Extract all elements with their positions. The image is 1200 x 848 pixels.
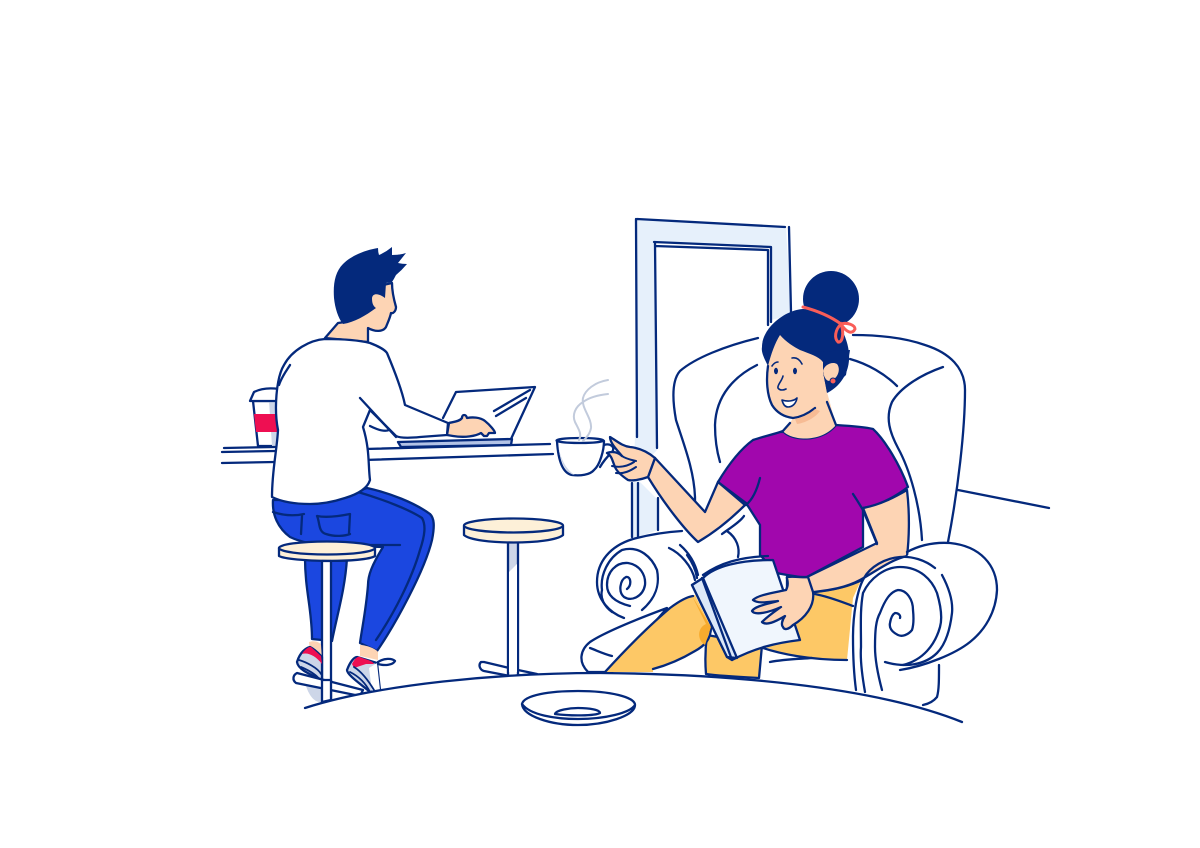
shadow under chin bbox=[795, 409, 820, 424]
stool under man bbox=[279, 542, 375, 702]
trousers: thigh right bbox=[760, 578, 862, 660]
chair back bbox=[673, 335, 964, 545]
neck and head skin bbox=[325, 283, 396, 342]
steam bbox=[574, 380, 608, 441]
table bbox=[305, 673, 962, 848]
arm holding cup bbox=[648, 458, 745, 542]
seat cushion left bbox=[581, 608, 667, 672]
coffee cup bbox=[556, 380, 613, 475]
laptop bbox=[398, 387, 535, 447]
hand typing bbox=[447, 415, 495, 437]
coffee cup to go bbox=[250, 388, 280, 446]
arm holding book bbox=[787, 490, 909, 592]
sneakers bbox=[297, 641, 395, 702]
door frame bbox=[632, 218, 791, 537]
armchair bbox=[581, 335, 965, 672]
wall line bbox=[958, 490, 1049, 508]
face and neck skin bbox=[767, 335, 836, 439]
ear bbox=[823, 363, 839, 381]
earring bbox=[830, 378, 836, 384]
hand over book bbox=[752, 577, 813, 629]
face outline bbox=[767, 366, 836, 432]
stool footrest bbox=[293, 673, 363, 696]
hair bbox=[334, 247, 407, 324]
ribbon bbox=[803, 307, 855, 342]
man bbox=[222, 247, 553, 702]
jeans back leg bbox=[305, 558, 347, 641]
hair bbox=[762, 309, 849, 393]
open book bbox=[692, 556, 800, 660]
left armrest bbox=[597, 516, 744, 618]
jeans bbox=[273, 488, 434, 651]
woman bbox=[605, 271, 909, 678]
bar counter bbox=[222, 444, 553, 464]
trousers: far leg bbox=[705, 635, 762, 678]
eyes bbox=[774, 368, 797, 374]
trousers: near leg bbox=[605, 595, 711, 672]
right armrest bbox=[850, 543, 997, 705]
brows, nose and mouth bbox=[772, 358, 802, 407]
hair side bbox=[815, 350, 850, 393]
torso shirt bbox=[718, 425, 908, 578]
stool front bbox=[464, 518, 563, 676]
hand holding cup bbox=[607, 437, 655, 480]
hair bun bbox=[803, 271, 859, 327]
shirt bbox=[272, 339, 448, 504]
plate bbox=[522, 691, 635, 725]
